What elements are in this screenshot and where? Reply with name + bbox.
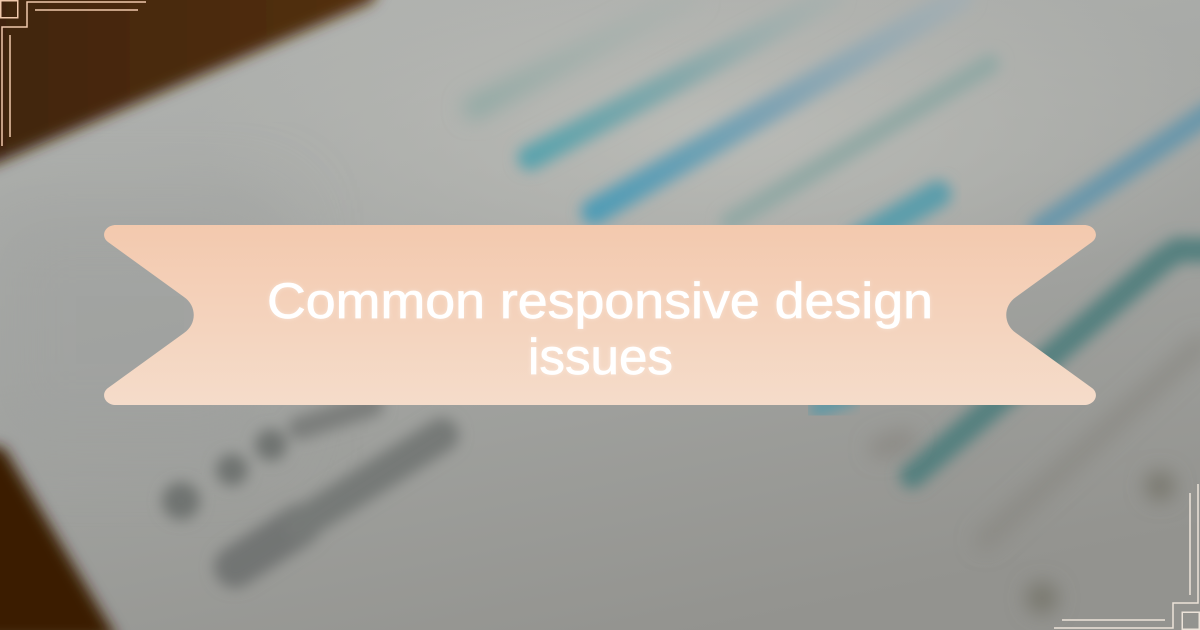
title: issues (528, 329, 673, 385)
banner ribbon (104, 225, 1096, 405)
brown desk corner, top left (0, 0, 392, 178)
ornament: bottom-right corner (1054, 484, 1199, 629)
brown desk corner, bottom left (0, 440, 118, 630)
blurred chart bars (474, 0, 1200, 476)
title (267, 273, 933, 385)
title: Common responsive design (267, 273, 933, 329)
ornament: top-left corner (1, 1, 146, 146)
blurred printed text (162, 405, 442, 567)
faint marks, lower right (880, 345, 1200, 614)
